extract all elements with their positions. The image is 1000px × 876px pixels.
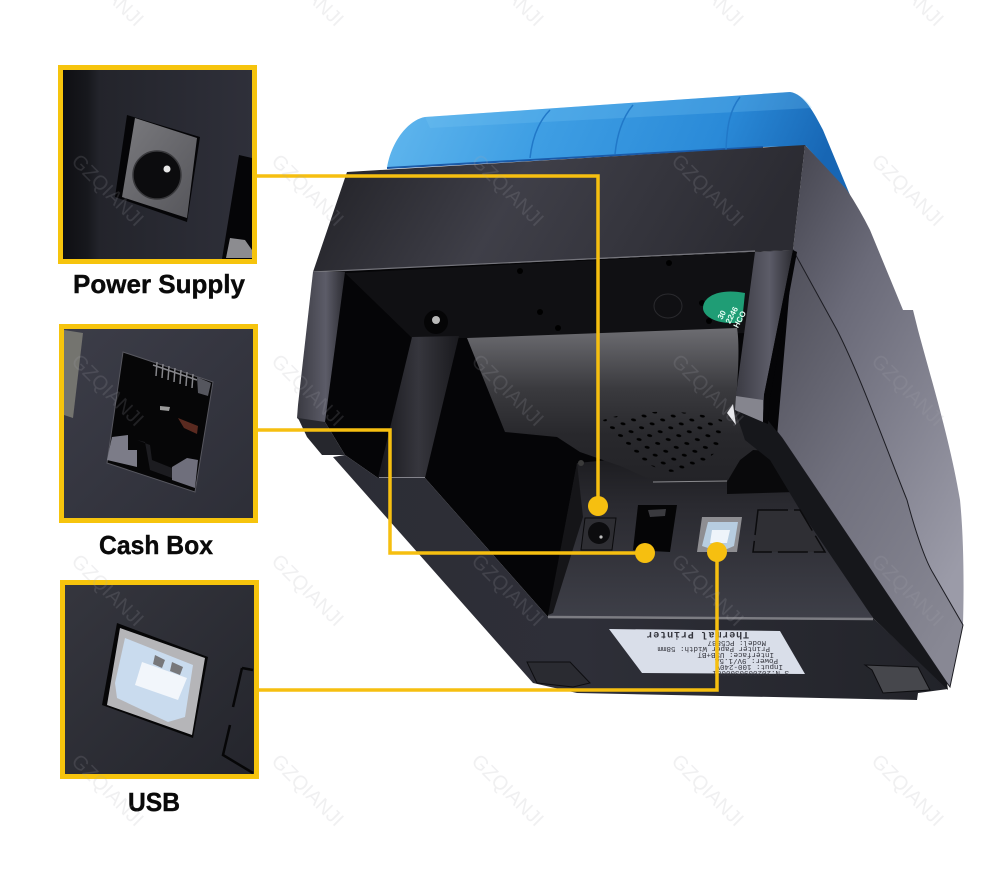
watermarks: GZQIANJI — [267, 150, 348, 231]
floor edge highlight — [548, 617, 873, 619]
rating label: Model: PC5887 — [707, 638, 766, 646]
watermarks: GZQIANJI — [667, 550, 748, 631]
watermarks: GZQIANJI — [467, 750, 548, 831]
usb port — [697, 517, 742, 552]
sheet bottom highlight — [653, 481, 727, 482]
label: usb: USB — [128, 787, 180, 817]
green sticker: HCO — [732, 309, 748, 329]
watermarks: GZQIANJI — [467, 350, 548, 431]
rating label: Interface: USB+BT — [697, 650, 774, 658]
wall strip left of floor — [548, 463, 583, 615]
watermarks: GZQIANJI — [667, 750, 748, 831]
watermarks: GZQIANJI — [667, 150, 748, 231]
cash box port — [633, 505, 677, 552]
right side lower panel — [759, 250, 963, 687]
right side upper face — [793, 145, 964, 687]
watermarks: GZQIANJI — [667, 350, 748, 431]
watermarks: GZQIANJI — [267, 350, 348, 431]
panel: power supply — [60, 68, 254, 299]
cash box frame — [62, 326, 256, 520]
green sticker — [703, 291, 748, 329]
watermarks: GZQIANJI — [67, 150, 148, 231]
green sticker: 2246 — [724, 305, 740, 325]
watermarks: GZQIANJI — [267, 750, 348, 831]
watermarks: GZQIANJI — [467, 550, 548, 631]
watermarks: GZQIANJI — [267, 550, 348, 631]
rating label: S N:2020090300001 — [712, 668, 789, 676]
usb frame — [62, 582, 256, 776]
callout: power supply connector — [257, 176, 608, 516]
rj11 close-up — [64, 330, 213, 492]
black interior cavity — [313, 250, 793, 617]
rating label: Printer Paper Width: 58mm — [657, 644, 770, 652]
rating label: Thermal Printer — [645, 628, 749, 640]
rubber foot right — [865, 665, 930, 693]
callout: cash box connector — [258, 430, 655, 563]
speaker grille — [603, 412, 724, 472]
base and left wall — [333, 455, 948, 700]
post highlight — [379, 477, 425, 479]
rating label: Input: 100-240V — [715, 662, 783, 670]
label: power supply: Power Supply — [73, 269, 246, 299]
printer photo — [297, 92, 964, 700]
right leg post — [735, 250, 793, 422]
right post highlight — [735, 396, 763, 422]
black diagonal strip — [735, 409, 948, 690]
watermarks: GZQIANJI — [867, 750, 948, 831]
left leg foot block — [298, 418, 345, 455]
power jack close-up — [115, 115, 252, 259]
rubber foot left — [527, 662, 590, 687]
rating label — [609, 628, 805, 676]
white notch — [727, 404, 736, 425]
right post edge — [763, 250, 797, 424]
left leg — [297, 272, 345, 425]
panel: cash box — [62, 326, 256, 560]
panel: usb — [62, 582, 256, 817]
label: cash box: Cash Box — [99, 530, 214, 560]
rear face of printer — [313, 145, 805, 272]
black wave under speaker — [727, 450, 795, 494]
watermarks: GZQIANJI — [867, 550, 948, 631]
centre post — [378, 336, 459, 478]
side port cover — [753, 510, 825, 552]
rating label: Power: 9V/1.5A — [714, 656, 778, 664]
watermarks: GZQIANJI — [67, 550, 148, 631]
screw and holes — [424, 260, 712, 466]
power supply frame — [60, 68, 254, 262]
blue paper lid — [387, 92, 850, 195]
power port — [581, 518, 616, 550]
crease highlight — [313, 251, 755, 272]
watermarks: GZQIANJI — [867, 150, 948, 231]
usb close-up — [102, 623, 253, 773]
callout: usb connector — [259, 542, 727, 690]
speaker sheet — [467, 328, 757, 481]
port floor — [548, 445, 873, 618]
green sticker: 30 — [716, 308, 728, 321]
watermarks: GZQIANJI — [467, 150, 548, 231]
watermarks: GZQIANJI — [867, 350, 948, 431]
watermarks: GZQIANJI — [67, 750, 148, 831]
inner upper band — [345, 252, 755, 338]
watermarks: GZQIANJI — [67, 350, 148, 431]
